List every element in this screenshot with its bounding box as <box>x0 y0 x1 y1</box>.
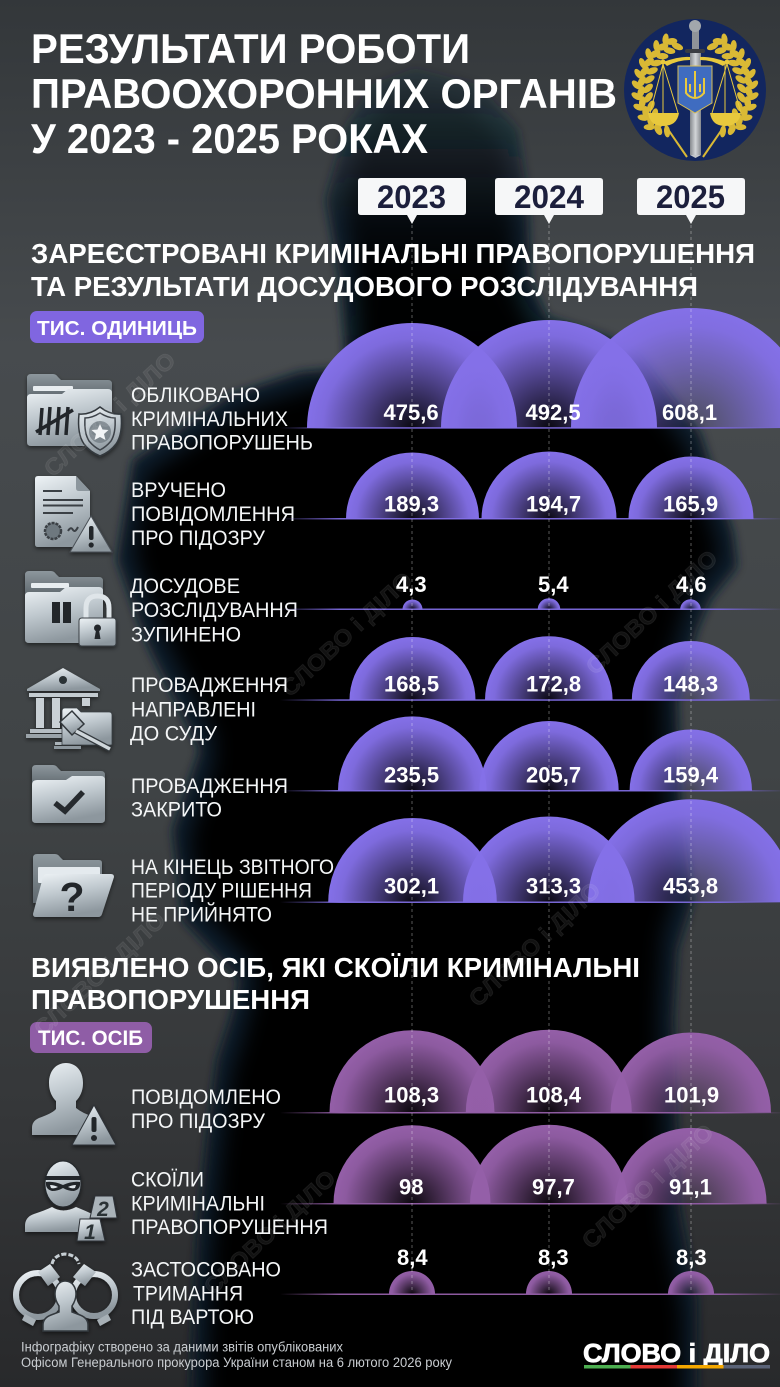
unit pill: thousand persons <box>30 1022 152 1053</box>
source note <box>21 1340 452 1370</box>
label: cases sent to court: НАПРАВЛЕНІ <box>131 698 256 722</box>
semicircles: 98 / 97,7 / 91,1 <box>334 1125 767 1204</box>
row: notified of suspicion <box>32 1030 780 1145</box>
label: cases sent to court: ДО СУДУ <box>130 722 218 746</box>
label: committed offences <box>131 1169 328 1239</box>
label: investigation suspended <box>130 575 298 646</box>
values <box>384 1083 719 1108</box>
values: 453,8 <box>663 873 718 898</box>
label: committed offences: ПРАВОПОРУШЕННЯ <box>131 1216 328 1239</box>
values: 4,6 <box>676 572 707 597</box>
label: no decision at end of period: НЕ ПРИЙНЯТО <box>131 902 272 926</box>
year callout 2025 <box>637 178 745 224</box>
title <box>31 25 617 162</box>
watermarks: СЛОВО і ДІЛО <box>581 545 723 680</box>
values: 168,5 <box>384 672 439 697</box>
watermarks: СЛОВО і ДІЛО <box>39 347 181 482</box>
label: notified of suspicion: ПРО ПІДОЗРУ <box>131 1110 266 1133</box>
label: committed offences: КРИМІНАЛЬНІ <box>131 1193 265 1216</box>
values: 108,3 <box>384 1083 439 1108</box>
values: 159,4 <box>663 763 719 788</box>
semicircles: 235,5 / 205,7 / 159,4 <box>338 716 752 791</box>
logo: Slovo i Dilo: СЛОВО і ДІЛО <box>583 1338 770 1368</box>
row: committed offences <box>25 1125 780 1244</box>
label: recorded offences: КРИМІНАЛЬНИХ <box>131 408 288 431</box>
section heading: registered offences <box>31 238 755 302</box>
values: 235,5 <box>384 763 439 788</box>
icon: masked person with evidence markers <box>25 1161 117 1244</box>
label: detention applied: ПІД ВАРТОЮ <box>131 1306 254 1329</box>
label: notices of suspicion served <box>131 479 295 550</box>
label: detention applied: ЗАСТОСОВАНО <box>131 1259 281 1282</box>
title: ПРАВООХОРОННИХ ОРГАНІВ <box>31 70 617 117</box>
label: investigation suspended: ДОСУДОВЕ <box>130 575 240 598</box>
label: investigation suspended: РОЗСЛІДУВАННЯ <box>131 599 298 622</box>
values <box>399 1174 712 1199</box>
icon: courthouse, folder and gavel <box>26 668 112 749</box>
icon: open folder with question mark: ? <box>59 874 85 920</box>
semicircles: 189,3 / 194,7 / 165,9 <box>346 452 754 519</box>
label: cases closed <box>131 775 288 822</box>
source note: Офісом Генерального прокурора України станом на 6 лютого 2026 року <box>21 1355 452 1370</box>
values <box>396 572 707 597</box>
label: notices of suspicion served: ВРУЧЕНО <box>131 479 226 502</box>
values: 165,9 <box>663 492 718 516</box>
title: У 2023 - 2025 РОКАХ <box>31 115 428 162</box>
row: recorded offences <box>27 308 780 456</box>
semicircles: 475,6 / 492,5 / 608,1 <box>307 308 780 428</box>
row: cases closed <box>32 716 780 823</box>
label: cases sent to court: ПРОВАДЖЕННЯ <box>131 674 288 697</box>
values: 8,3 <box>538 1245 569 1270</box>
watermarks: СЛОВО і ДІЛО <box>464 877 606 1012</box>
icon: folder with tally and badge <box>27 374 121 456</box>
icon: handcuffs with person <box>16 1254 115 1331</box>
values: 313,3 <box>526 873 581 898</box>
label: cases closed: ПРОВАДЖЕННЯ <box>131 775 288 798</box>
semicircles: 108,3 / 108,4 / 101,9 <box>330 1030 771 1113</box>
values: 205,7 <box>526 763 581 788</box>
label: no decision at end of period: НА КІНЕЦЬ ЗВІТНОГО <box>131 856 334 879</box>
year callout 2023 <box>358 178 466 224</box>
icon: folder with pause and lock <box>25 571 116 646</box>
values: 8,4 <box>397 1245 428 1270</box>
label: committed offences: СКОЇЛИ <box>131 1169 204 1192</box>
values: 608,1 <box>662 400 717 425</box>
watermarks: СЛОВО і ДІЛО <box>199 1165 341 1300</box>
watermarks: СЛОВО і ДІЛО <box>276 567 418 702</box>
watermarks <box>29 347 723 1300</box>
label: recorded offences <box>131 384 313 454</box>
icon: masked person with evidence markers: 2 <box>96 1198 109 1221</box>
values: 108,4 <box>526 1083 582 1108</box>
values: 97,7 <box>532 1174 575 1199</box>
values: 91,1 <box>669 1174 712 1199</box>
section heading: persons identified: ПРАВОПОРУШЕННЯ <box>31 984 310 1015</box>
semicircles: 302,1 / 313,3 / 453,8 <box>328 799 780 902</box>
values: 148,3 <box>663 672 718 697</box>
label: cases sent to court <box>130 674 288 746</box>
values: 172,8 <box>526 672 581 697</box>
values <box>384 873 718 898</box>
values: 4,3 <box>396 572 427 597</box>
source note: Інфографіку створено за даними звітів опублікованих <box>21 1340 343 1354</box>
semicircles: 8,4 / 8,3 / 8,3 <box>389 1271 714 1294</box>
label: no decision at end of period <box>131 856 334 926</box>
year callout 2023: 2023 <box>377 179 446 215</box>
section heading: registered offences: ТА РЕЗУЛЬТАТИ ДОСУДОВОГО РОЗСЛІДУВАННЯ <box>31 271 698 302</box>
label: notices of suspicion served: ПРО ПІДОЗРУ <box>131 527 266 550</box>
values <box>384 672 718 697</box>
values: 5,4 <box>538 572 569 597</box>
emblem: prosecutor general office <box>624 19 766 161</box>
values: 101,9 <box>664 1083 719 1108</box>
unit pill: thousand units: ТИС. ОДИНИЦЬ <box>37 317 197 340</box>
icon: masked person with evidence markers: 1 <box>84 1221 96 1244</box>
section heading: persons identified <box>31 952 640 1015</box>
label: no decision at end of period: ПЕРІОДУ РІШЕННЯ <box>131 880 312 902</box>
row: no decision at end of period <box>33 799 780 926</box>
values: 194,7 <box>526 492 581 516</box>
year callout 2024 <box>495 178 603 224</box>
values: 302,1 <box>384 873 439 898</box>
values <box>384 400 717 425</box>
label: recorded offences: ОБЛІКОВАНО <box>131 384 260 407</box>
values: 475,6 <box>384 400 439 425</box>
values: 8,3 <box>676 1245 707 1270</box>
values: 98 <box>399 1174 423 1199</box>
values <box>384 763 719 788</box>
row: cases sent to court <box>26 636 780 749</box>
unit pill: thousand units <box>30 311 204 343</box>
label: cases closed: ЗАКРИТО <box>131 798 222 822</box>
semicircles: 4,3 / 5,4 / 4,6 <box>402 598 701 610</box>
icon: open folder with question mark <box>33 854 114 920</box>
label: notified of suspicion <box>131 1086 281 1133</box>
row: notices of suspicion served <box>35 452 780 552</box>
icon: person with warning <box>32 1063 116 1145</box>
label: detention applied <box>131 1259 281 1329</box>
label: notified of suspicion: ПОВІДОМЛЕНО <box>131 1086 281 1109</box>
label: investigation suspended: ЗУПИНЕНО <box>131 624 241 646</box>
values: 492,5 <box>526 400 581 425</box>
icon: document with warning <box>35 476 112 552</box>
values <box>384 492 718 516</box>
label: notices of suspicion served: ПОВІДОМЛЕННЯ <box>131 503 295 526</box>
icon: folder with check mark <box>32 765 105 823</box>
label: detention applied: ТРИМАННЯ <box>133 1283 243 1306</box>
section heading: registered offences: ЗАРЕЄСТРОВАНІ КРИМІНАЛЬНІ ПРАВОПОРУШЕННЯ <box>31 238 755 269</box>
watermarks: СЛОВО і ДІЛО <box>29 907 171 1042</box>
values <box>397 1245 707 1270</box>
watermarks: СЛОВО і ДІЛО <box>577 1119 719 1254</box>
year callout 2025: 2025 <box>656 179 725 215</box>
title: РЕЗУЛЬТАТИ РОБОТИ <box>31 25 470 72</box>
values: 189,3 <box>384 492 439 516</box>
unit pill: thousand persons: ТИС. ОСІБ <box>38 1027 143 1050</box>
year callout 2024: 2024 <box>514 179 584 215</box>
semicircles: 168,5 / 172,8 / 148,3 <box>350 636 750 700</box>
row: investigation suspended <box>25 571 780 646</box>
label: recorded offences: ПРАВОПОРУШЕНЬ <box>131 432 313 454</box>
row: detention applied <box>16 1245 780 1331</box>
section heading: persons identified: ВИЯВЛЕНО ОСІБ, ЯКІ СКОЇЛИ КРИМІНАЛЬНІ <box>31 952 640 983</box>
